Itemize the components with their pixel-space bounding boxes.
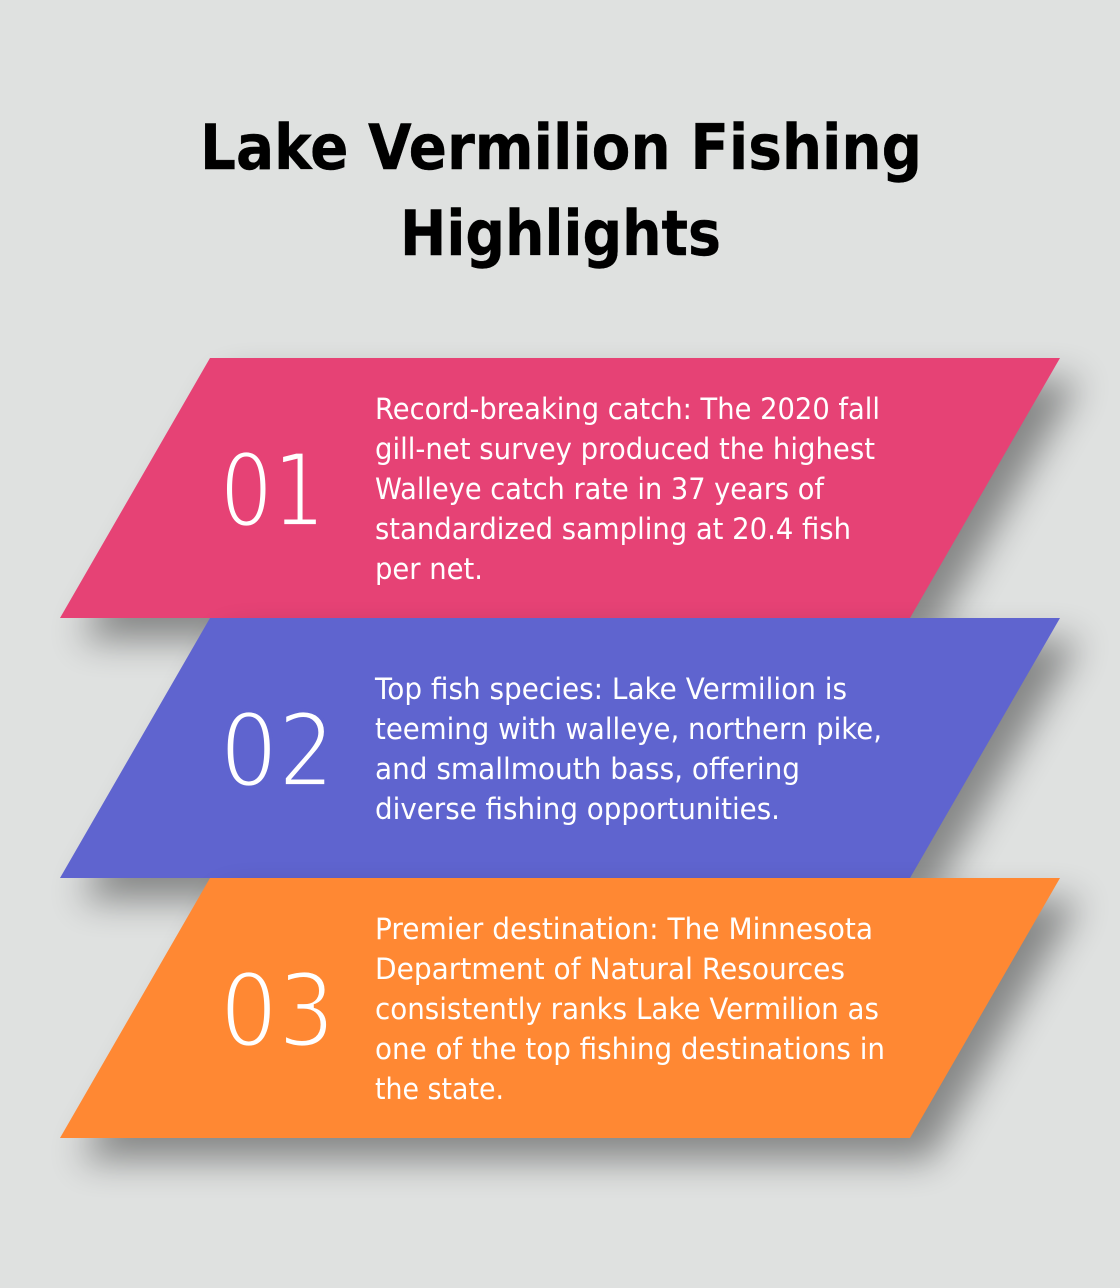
- text block: premier destination: one of the top fishing destinations in: [375, 1032, 885, 1066]
- text block: record-breaking catch: Record-breaking catch: The 2020 fall: [375, 392, 880, 426]
- number 01: 01: [220, 432, 325, 551]
- text block: record-breaking catch: Walleye catch rate in 37 years of: [375, 472, 825, 506]
- text block: premier destination: the state.: [375, 1072, 504, 1106]
- parallelogram: blue: [60, 618, 1060, 878]
- title: Lake Vermilion Fishing: [200, 111, 922, 184]
- number 03: 03: [220, 952, 335, 1071]
- text block: premier destination: Premier destination: The Minnesota: [375, 912, 873, 946]
- text block: record-breaking catch: standardized sampling at 20.4 fish: [375, 512, 851, 546]
- number 02: 02: [220, 692, 335, 811]
- title: [200, 111, 922, 270]
- text block: premier destination: [375, 912, 885, 1106]
- text block: top fish species: [374, 672, 882, 826]
- text block: premier destination: consistently ranks Lake Vermilion as: [375, 992, 879, 1026]
- title: Highlights: [400, 197, 721, 270]
- panel: step 03 premier destination: [60, 878, 1080, 1160]
- text block: record-breaking catch: [375, 392, 880, 586]
- text block: top fish species: teeming with walleye, northern pike,: [375, 712, 882, 746]
- text block: top fish species: and smallmouth bass, offering: [375, 752, 800, 786]
- text block: record-breaking catch: per net.: [375, 552, 483, 586]
- text block: premier destination: Department of Natural Resources: [375, 952, 845, 986]
- panel: step 01 record-breaking catch: [60, 358, 1080, 640]
- text block: top fish species: diverse fishing opportunities.: [375, 792, 780, 826]
- text block: record-breaking catch: gill-net survey produced the highest: [375, 432, 875, 466]
- panel: step 02 top fish species: [60, 618, 1080, 900]
- parallelogram: orange: [60, 878, 1060, 1138]
- text block: top fish species: Top fish species: Lake Vermilion is: [374, 672, 847, 706]
- parallelogram: pink: [60, 358, 1060, 618]
